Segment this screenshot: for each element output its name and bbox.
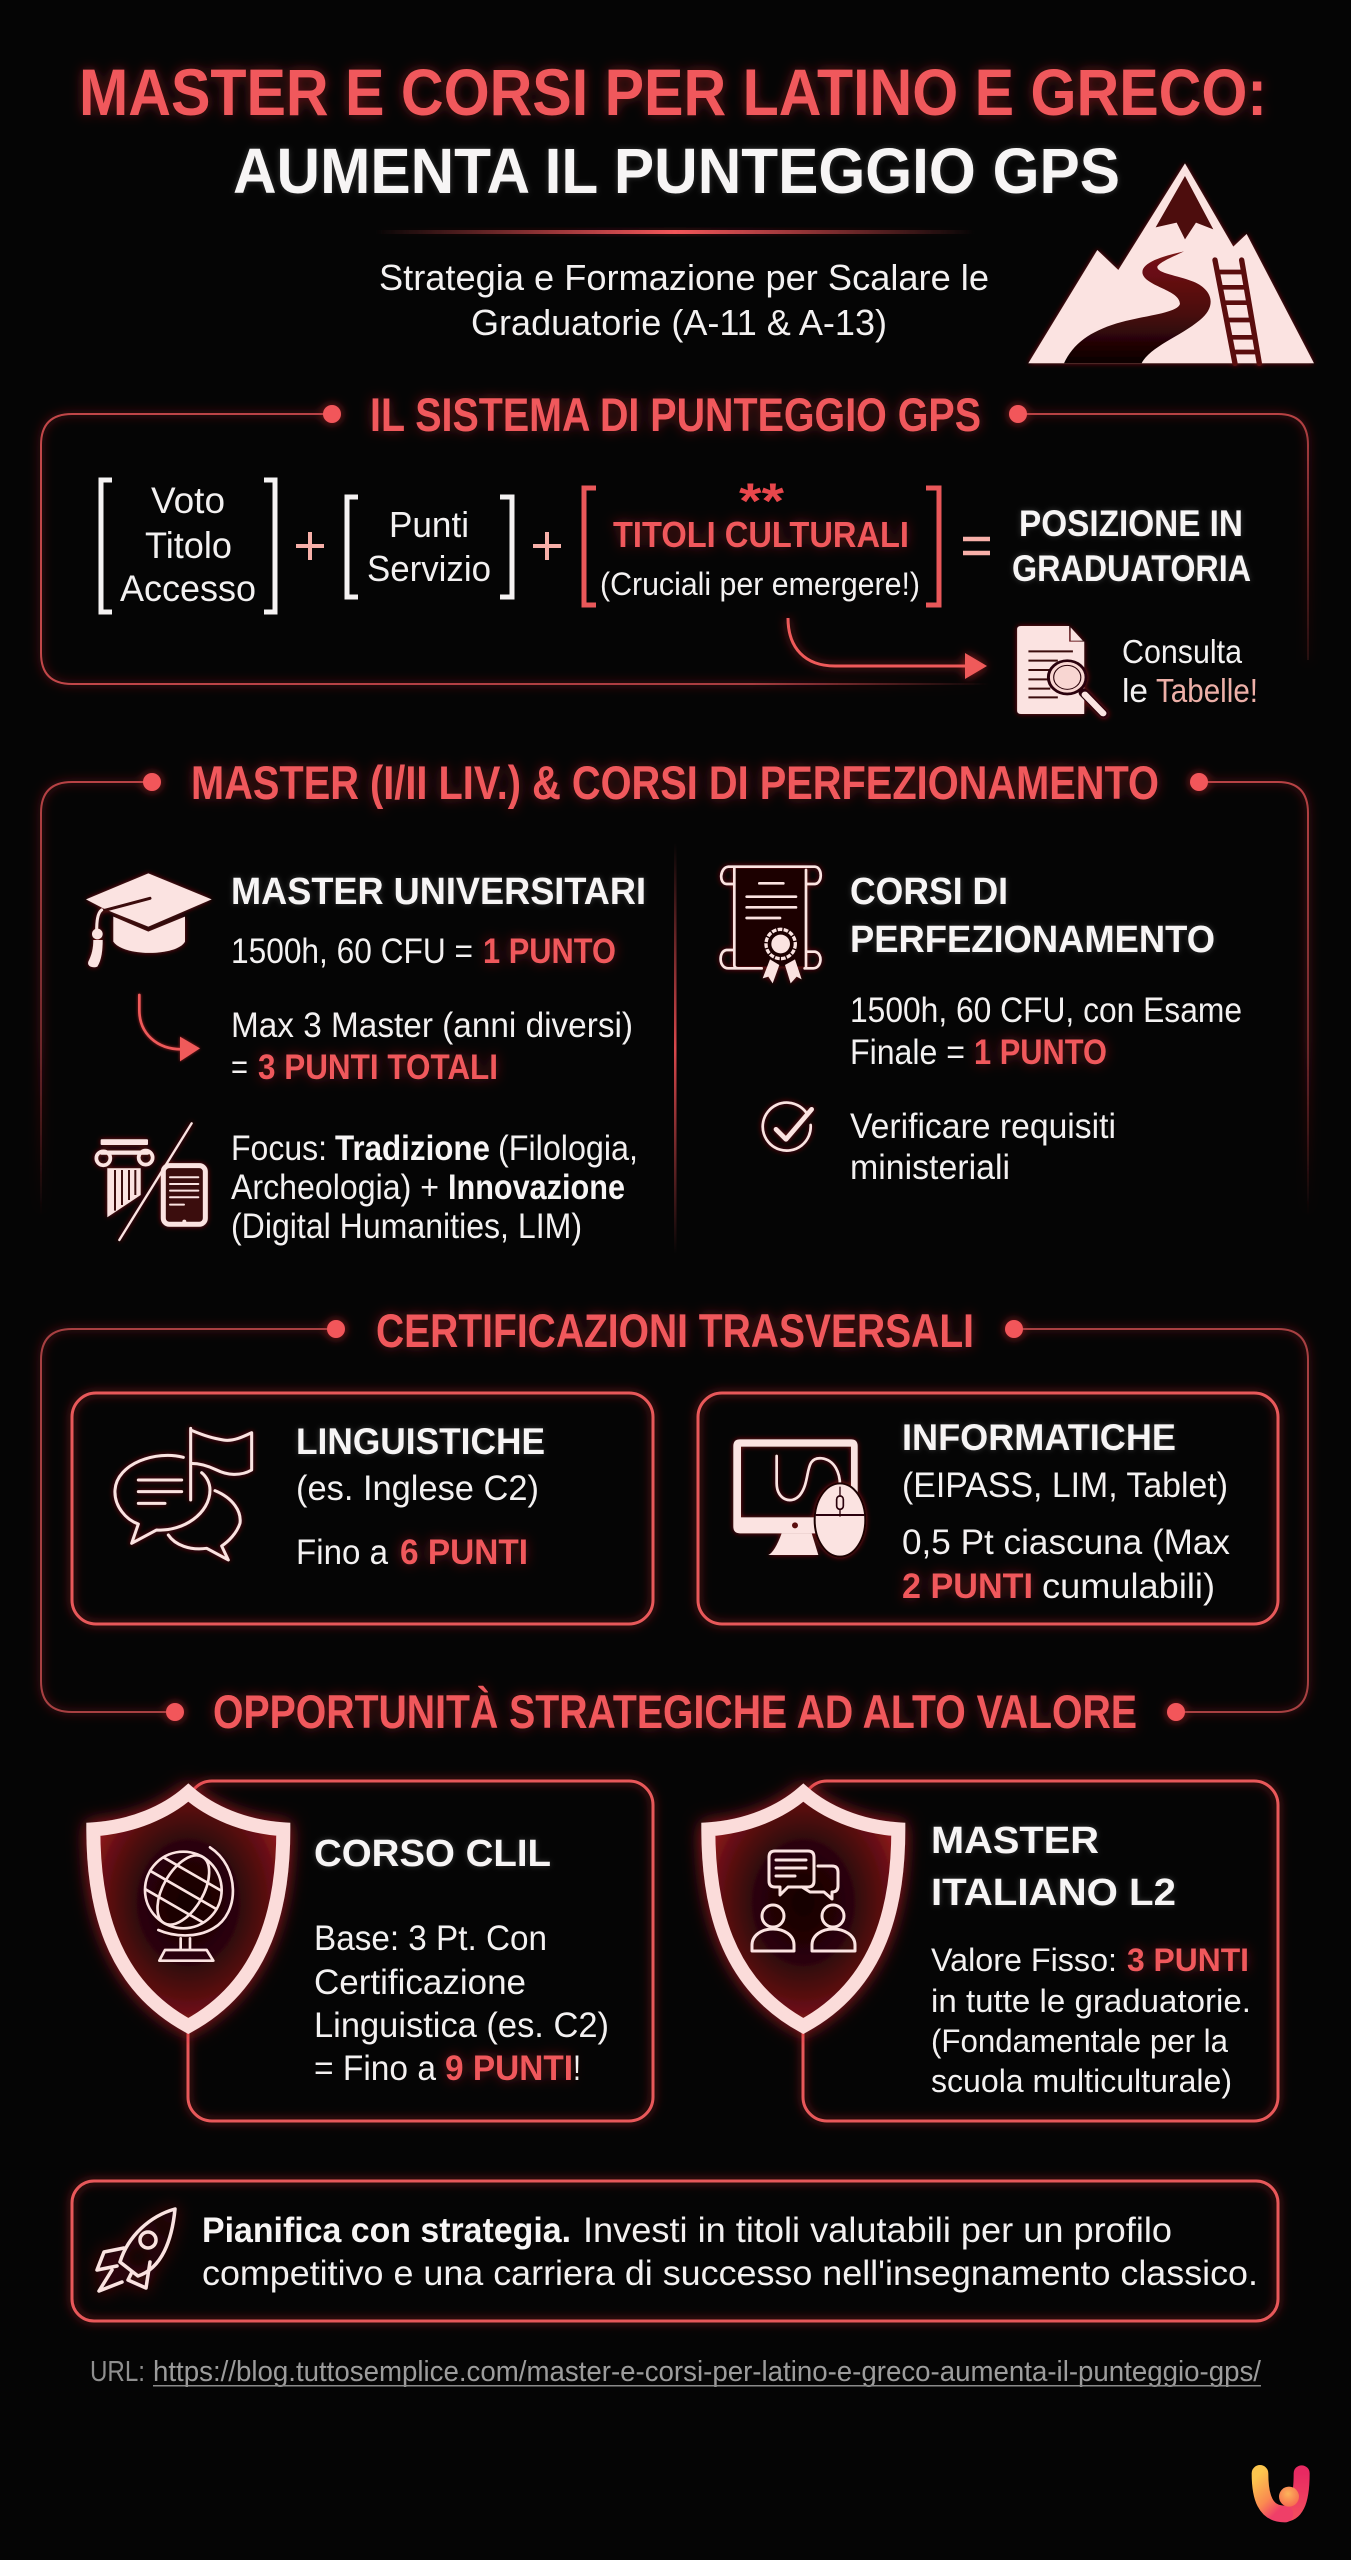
icon: graduation cap bbox=[86, 873, 212, 967]
text: ! bbox=[573, 2049, 581, 2088]
text: (EIPASS, LIM, Tablet) bbox=[902, 1466, 1228, 1505]
text: in tutte le graduatorie. bbox=[931, 1983, 1251, 2019]
text bbox=[902, 1417, 1230, 1606]
subtitle bbox=[379, 257, 989, 343]
card heading: master universitari: MASTER UNIVERSITARI bbox=[231, 871, 646, 913]
icon: shield with people talking bbox=[708, 1793, 898, 2026]
text: esame finale: 1500h, 60 CFU, con Esame bbox=[850, 991, 1242, 1030]
result: posizione in graduatoria: POSIZIONE IN bbox=[1019, 503, 1243, 544]
icon: column and tablet bbox=[96, 1123, 205, 1240]
heading: IL SISTEMA DI PUNTEGGIO GPS bbox=[370, 388, 981, 441]
formula: voto titolo accesso bbox=[101, 480, 275, 612]
formula: voto titolo accesso: Voto bbox=[151, 480, 225, 521]
icon: shield with globe bbox=[93, 1793, 283, 2026]
text: Linguistica (es. C2) bbox=[314, 2006, 609, 2045]
formula: titoli culturali: ** bbox=[739, 473, 785, 529]
panel frame bbox=[41, 405, 1308, 684]
card heading: corsi di perfezionamento: PERFEZIONAMENTO bbox=[850, 919, 1215, 961]
column divider bbox=[674, 843, 676, 1254]
text: INFORMATICHE bbox=[902, 1417, 1176, 1458]
text: verificare requisiti: ministeriali bbox=[850, 1148, 1010, 1187]
formula: titoli culturali: (Cruciali per emergere!) bbox=[600, 566, 920, 602]
text: esame finale: Finale = bbox=[850, 1033, 965, 1072]
arrow: master cumulabili bbox=[139, 995, 200, 1061]
result: posizione in graduatoria bbox=[1012, 503, 1251, 589]
text: verificare requisiti bbox=[850, 1107, 1116, 1187]
text: max 3 master: = bbox=[231, 1048, 248, 1087]
text: scuola multiculturale) bbox=[931, 2063, 1232, 2099]
text: (Fondamentale per la bbox=[931, 2023, 1228, 2059]
text bbox=[931, 1820, 1251, 2099]
heading: opportunità strategiche: OPPORTUNITÀ STRATEGICHE AD ALTO VALORE bbox=[213, 1685, 1137, 1738]
source url: URL: bbox=[90, 2356, 145, 2388]
text: 1 punto: 1500h, 60 CFU = bbox=[231, 932, 473, 971]
card: master italiano l2 bbox=[708, 1781, 1278, 2121]
card heading: corsi di perfezionamento: CORSI DI bbox=[850, 871, 1008, 913]
card: linguistiche bbox=[72, 1393, 653, 1624]
formula: punti servizio: Punti bbox=[389, 504, 469, 545]
text: 0,5 Pt ciascuna (Max bbox=[902, 1523, 1230, 1562]
text: 1 punto: 1 PUNTO bbox=[483, 932, 616, 971]
text: MASTER bbox=[931, 1820, 1099, 1862]
result: posizione in graduatoria: GRADUATORIA bbox=[1012, 548, 1251, 589]
panel: master e corsi di perfezionamento bbox=[41, 756, 1308, 1254]
title: AUMENTA IL PUNTEGGIO GPS bbox=[233, 135, 1120, 207]
icon: mountain with path and ladder bbox=[1028, 163, 1314, 363]
icon: diploma scroll with seal bbox=[721, 867, 821, 983]
text: 9 PUNTI bbox=[445, 2049, 573, 2088]
text: esame finale: 1 PUNTO bbox=[974, 1033, 1107, 1072]
text: competitivo e una carriera di successo nell'insegnamento classico. bbox=[202, 2254, 1258, 2293]
text: focus: (Filologia, bbox=[498, 1129, 638, 1168]
formula: voto titolo accesso: Accesso bbox=[120, 568, 256, 609]
text: max 3 master: 3 PUNTI TOTALI bbox=[258, 1048, 498, 1087]
text: esame finale bbox=[850, 991, 1242, 1072]
heading: MASTER (I/II LIV.) & CORSI DI PERFEZIONAMENTO bbox=[191, 756, 1159, 809]
text: Certificazione bbox=[314, 1963, 526, 2002]
text: CORSO CLIL bbox=[314, 1833, 551, 1875]
plus sign bbox=[296, 532, 324, 560]
formula: punti servizio bbox=[347, 497, 512, 597]
logo bbox=[1260, 2473, 1302, 2514]
text: Investi in titoli valutabili per un profilo bbox=[583, 2211, 1172, 2250]
title bbox=[79, 55, 1267, 207]
text: focus bbox=[231, 1129, 638, 1246]
panel frame bbox=[41, 773, 1308, 1215]
formula: voto titolo accesso: Titolo bbox=[145, 525, 232, 566]
text bbox=[202, 2211, 1258, 2293]
note: consulta le tabelle: Consulta bbox=[1122, 633, 1243, 670]
text: focus: Archeologia) + bbox=[231, 1168, 439, 1207]
icon: rocket bbox=[97, 2209, 175, 2291]
title divider bbox=[375, 230, 975, 234]
text: focus: Focus: bbox=[231, 1129, 327, 1168]
equals sign bbox=[963, 539, 990, 553]
text: cumulabili) bbox=[1042, 1567, 1215, 1606]
text: max 3 master: Max 3 Master (anni diversi) bbox=[231, 1006, 633, 1045]
text: LINGUISTICHE bbox=[296, 1421, 545, 1462]
text bbox=[296, 1421, 545, 1572]
text: 1 punto bbox=[231, 932, 616, 971]
panel: certificazioni trasversali bbox=[41, 1304, 1308, 1721]
text: focus: Tradizione bbox=[335, 1129, 490, 1168]
subtitle: Graduatorie (A-11 & A-13) bbox=[471, 302, 887, 343]
note: consulta le tabelle: Tabelle! bbox=[1156, 672, 1258, 709]
subtitle: Strategia e Formazione per Scalare le bbox=[379, 257, 989, 298]
icon: check mark bbox=[763, 1103, 812, 1151]
arrow to tabelle bbox=[788, 618, 987, 679]
icon: speech bubbles with flag bbox=[115, 1428, 252, 1560]
text: Valore Fisso: bbox=[931, 1942, 1117, 1978]
text: ITALIANO L2 bbox=[931, 1872, 1176, 1914]
text: 6 PUNTI bbox=[400, 1533, 528, 1572]
card: informatiche bbox=[698, 1393, 1278, 1624]
text: (es. Inglese C2) bbox=[296, 1469, 539, 1508]
text: = Fino a bbox=[314, 2049, 436, 2088]
text: focus: (Digital Humanities, LIM) bbox=[231, 1207, 582, 1246]
text bbox=[314, 1833, 609, 2088]
panel: sistema di punteggio bbox=[41, 388, 1308, 714]
text: verificare requisiti: Verificare requisiti bbox=[850, 1107, 1116, 1146]
callout: pianifica con strategia bbox=[72, 2181, 1278, 2321]
heading: CERTIFICAZIONI TRASVERSALI bbox=[376, 1304, 974, 1357]
text: max 3 master bbox=[231, 1006, 633, 1087]
formula: titoli culturali: TITOLI CULTURALI bbox=[613, 514, 909, 555]
text: focus: Innovazione bbox=[448, 1168, 625, 1207]
icon: computer and mouse bbox=[733, 1439, 865, 1557]
card: corso clil bbox=[93, 1781, 653, 2121]
card heading: corsi di perfezionamento bbox=[850, 871, 1215, 961]
text: Base: 3 Pt. Con bbox=[314, 1919, 547, 1958]
plus sign bbox=[533, 532, 561, 560]
panel frame bbox=[41, 1320, 1308, 1721]
source url: https://blog.tuttosemplice.com/master-e-corsi-per-latino-e-greco-aumenta-il-punteggio-gps/ bbox=[153, 2356, 1262, 2388]
text: 2 PUNTI bbox=[902, 1567, 1033, 1606]
formula: punti servizio: Servizio bbox=[367, 548, 491, 589]
text: Fino a bbox=[296, 1533, 389, 1572]
note: consulta le tabelle: le bbox=[1122, 672, 1148, 709]
text: 3 PUNTI bbox=[1127, 1942, 1249, 1978]
formula: titoli culturali bbox=[584, 473, 939, 605]
icon: document with magnifier bbox=[1017, 626, 1104, 714]
text: Pianifica con strategia. bbox=[202, 2211, 571, 2250]
note: consulta le tabelle bbox=[1122, 633, 1258, 709]
